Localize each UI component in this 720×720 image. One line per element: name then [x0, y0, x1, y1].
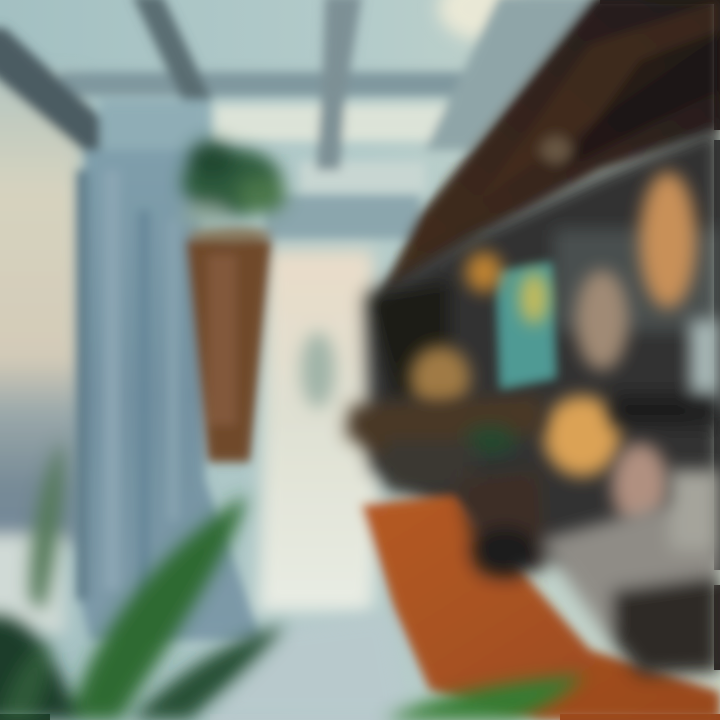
lamp: amber shade: [466, 252, 502, 292]
lower floor reflection: [205, 612, 410, 720]
left window with skyline: [0, 75, 82, 635]
wooden slatted ceiling: [378, 0, 720, 300]
wall art and warm lamps: [410, 172, 720, 527]
hanging planter: [186, 227, 272, 462]
dark side table: [458, 470, 545, 578]
doorway figure: [301, 332, 335, 408]
counter and table: [345, 395, 720, 490]
shelf: warm objects: [410, 346, 470, 410]
bright central doorway: [258, 250, 385, 612]
foreground plant leaves, lower right: [385, 675, 585, 720]
vase: pink tone: [612, 443, 668, 527]
grey sofa: [540, 470, 720, 676]
blue column: [76, 150, 262, 640]
art: teal and yellow canvas: [496, 262, 556, 390]
planter foliage: [181, 140, 286, 225]
art: orange figure: [640, 172, 696, 308]
foreground plant leaves, lower left: [0, 440, 285, 720]
ceiling beams and glass panes: [0, 0, 600, 239]
orange floor: [362, 495, 720, 720]
lamp: glowing shade: [544, 396, 620, 476]
art: beige piece: [576, 270, 628, 370]
dark right wall: [365, 125, 720, 560]
sun glare: [438, 0, 526, 40]
art: pale panel: [690, 320, 720, 410]
